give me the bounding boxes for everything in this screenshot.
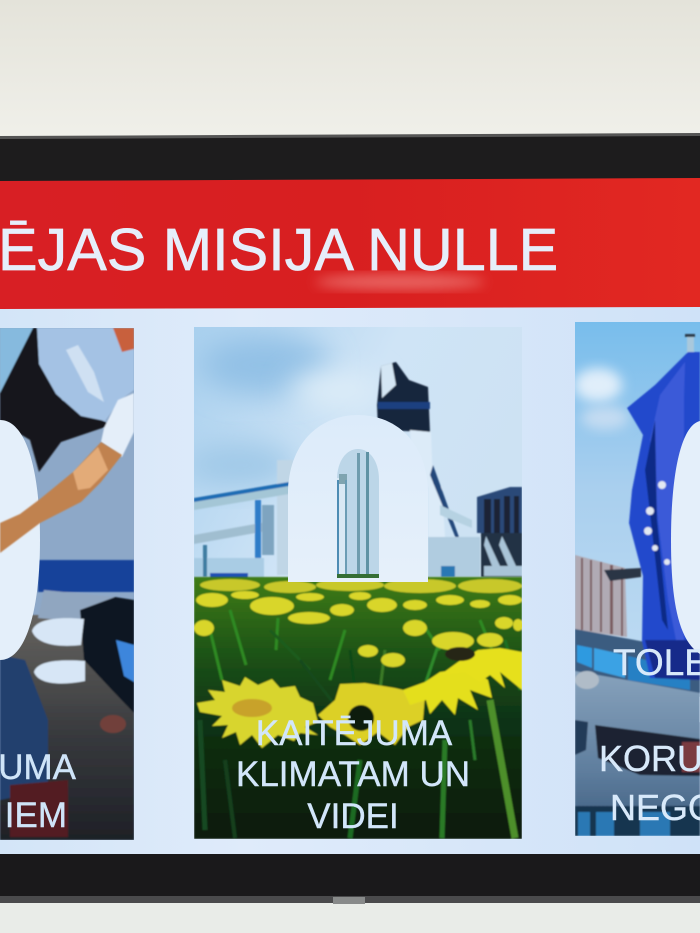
middle caption: KLIMATAM UN — [236, 755, 470, 794]
building — [575, 555, 627, 637]
panel: middle photo with factory and dandelions — [185, 327, 523, 839]
middle caption — [236, 714, 470, 836]
title: ĒJAS MISIJA NULLE — [0, 216, 558, 283]
meadow — [194, 577, 523, 839]
large flower right — [403, 668, 492, 715]
flagpole — [686, 336, 695, 354]
left caption: IEM — [5, 796, 67, 835]
left caption — [0, 754, 76, 828]
middle caption: KAITĒJUMA — [256, 714, 453, 753]
large flower left — [197, 677, 318, 748]
factory — [194, 362, 522, 581]
large zero — [288, 415, 428, 582]
yellow dandelion band — [200, 579, 522, 593]
right caption: KORU — [599, 738, 700, 779]
middle caption: VIDEI — [307, 797, 399, 836]
large zero — [671, 421, 700, 654]
panel: left photo with worker — [0, 328, 134, 840]
EU flag — [627, 352, 700, 680]
arm — [0, 442, 122, 553]
screen background — [0, 306, 700, 854]
title banner — [0, 178, 700, 309]
panel: right photo with EU flag — [574, 322, 700, 836]
large flower centre — [318, 683, 425, 745]
icon: large zero — [0, 420, 40, 660]
right caption — [599, 642, 700, 828]
